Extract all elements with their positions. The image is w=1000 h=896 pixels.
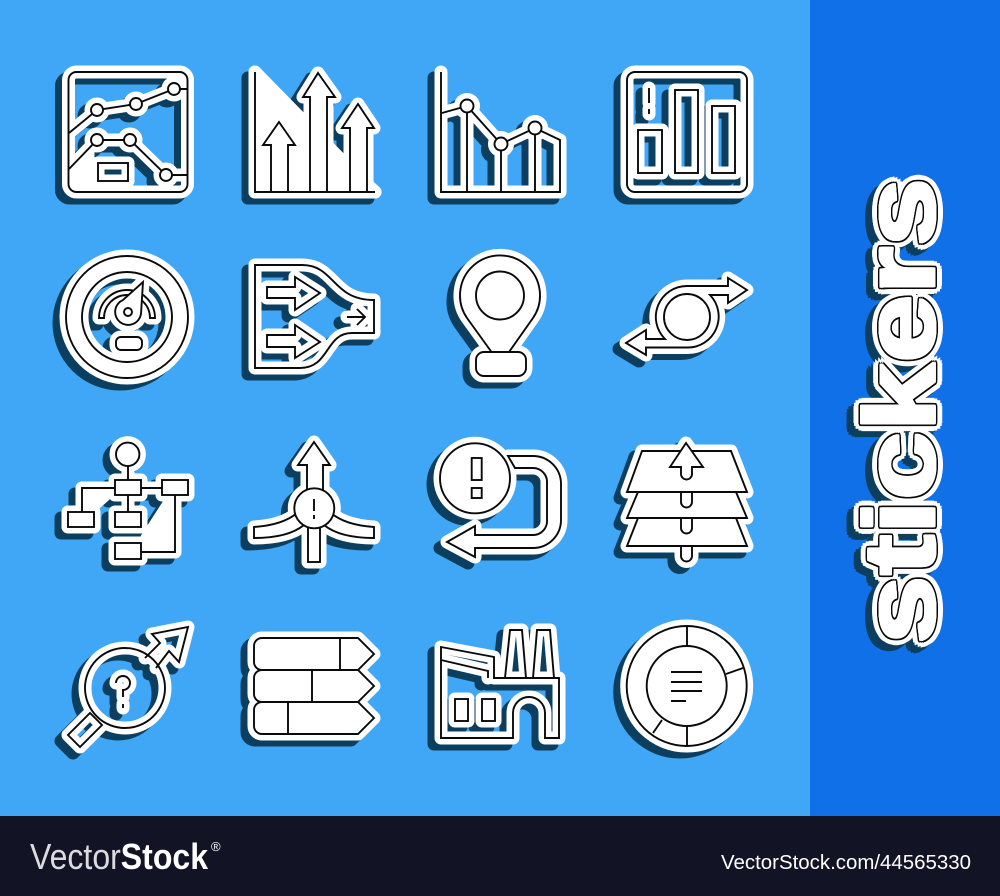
icon: map pin bbox=[460, 255, 540, 376]
icon: line chart in frame bbox=[68, 72, 188, 192]
icon: alert with return arrow bbox=[440, 443, 561, 557]
image id text: VectorStock.com/44565330 bbox=[721, 852, 971, 874]
icon: funnel with arrows bbox=[255, 265, 374, 368]
icon: question mark with arrow bbox=[68, 627, 188, 747]
icon: bar chart with exclamation bbox=[627, 72, 747, 192]
icon: factory bbox=[441, 630, 559, 738]
icon: circle with two arrows bbox=[626, 278, 747, 355]
icon: registered mark: ® bbox=[211, 839, 221, 854]
icon: merging arrows with exclamation bbox=[254, 442, 374, 562]
panel: icon grid bbox=[66, 72, 747, 747]
panel: side title band bbox=[810, 0, 1000, 816]
icon: stacked layers with arrow bbox=[627, 443, 747, 562]
panel: footer bar bbox=[0, 816, 1000, 896]
icon: falling line and column chart bbox=[441, 72, 560, 192]
heading: stickers: stickers bbox=[844, 178, 956, 644]
icon: flowchart bbox=[68, 443, 188, 559]
icon: donut chart with text lines bbox=[627, 626, 747, 746]
icon: stacked arrow tags bbox=[254, 638, 374, 734]
icon: gauge dial bbox=[66, 256, 188, 378]
icon: rising arrows chart bbox=[255, 72, 375, 192]
logo: VectorStock: VectorStock bbox=[30, 837, 208, 877]
